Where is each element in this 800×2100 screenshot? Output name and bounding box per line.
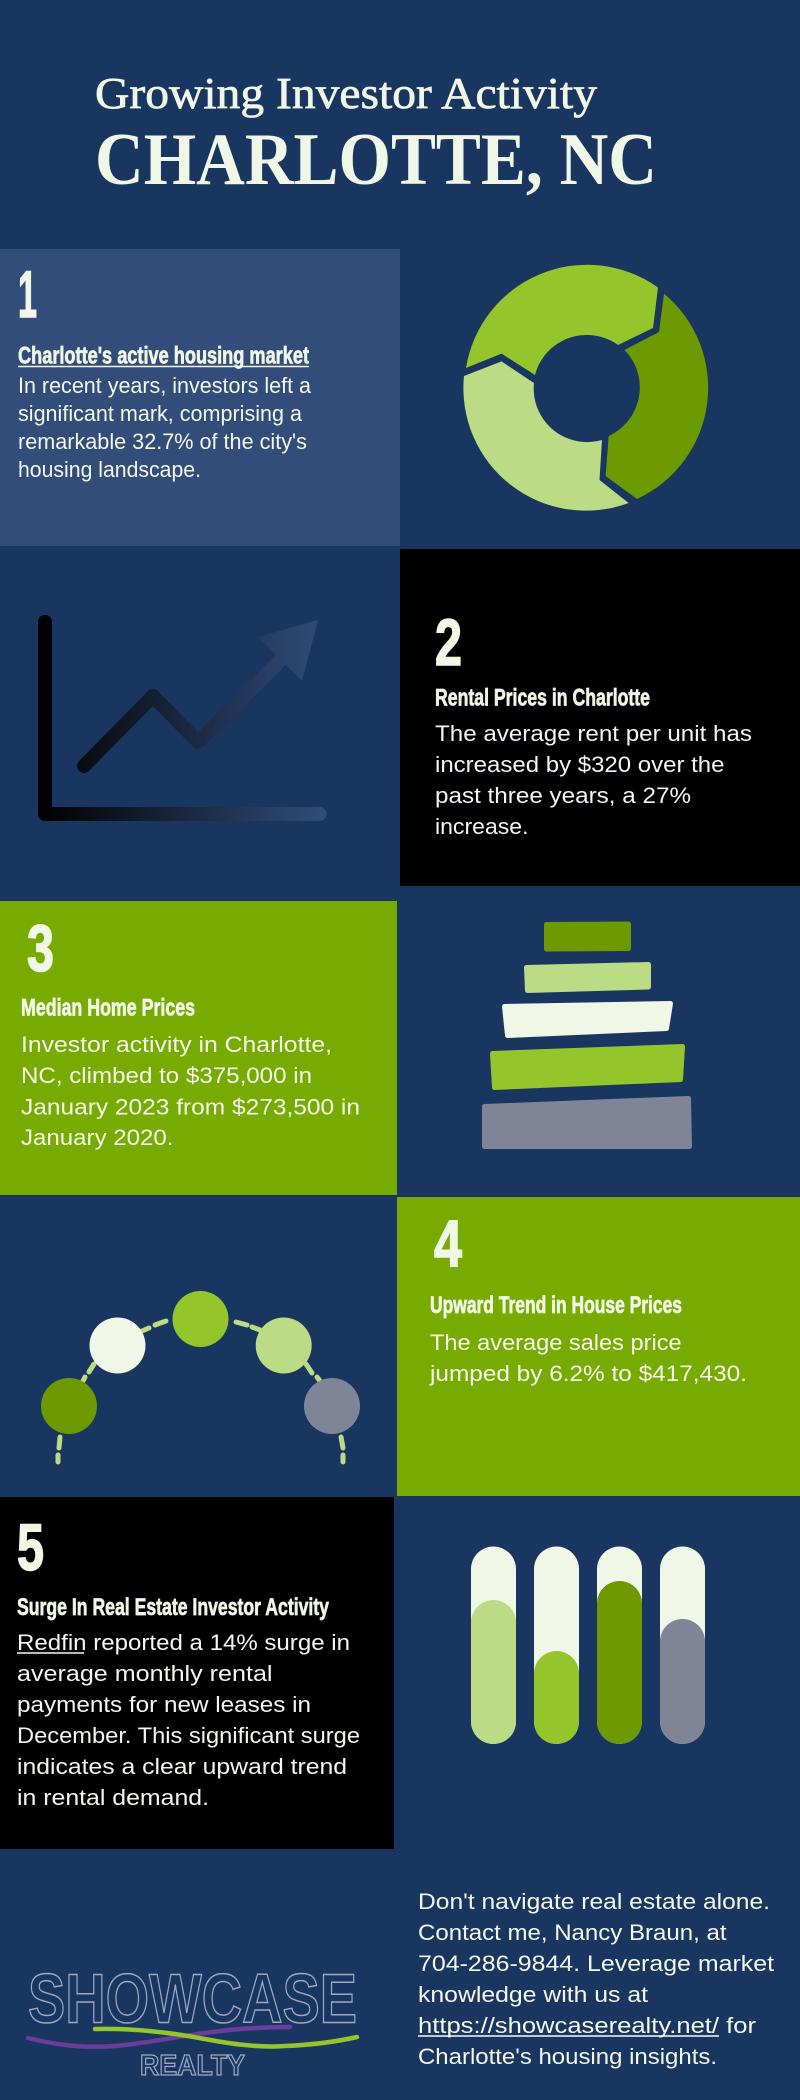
donut chart bbox=[463, 265, 708, 511]
body text 3: NC, climbed to $375,000 in bbox=[21, 1063, 312, 1088]
body text 2: The average rent per unit has bbox=[435, 721, 752, 746]
body text 3: January 2023 from $273,500 in bbox=[21, 1094, 360, 1120]
body text 2: increased by $320 over the bbox=[435, 752, 724, 777]
chart: vertical pill bars bbox=[471, 1546, 705, 1744]
heading 3: Median Home Prices bbox=[21, 995, 195, 1022]
title line: Growing Investor Activity: Growing Investor Activity bbox=[95, 69, 597, 118]
panel 3: median home prices bbox=[0, 901, 397, 1195]
diagram: arc of connected circles bbox=[41, 1291, 360, 1462]
contact call to action bbox=[418, 1889, 774, 2069]
body text 2: past three years, a 27% bbox=[435, 783, 691, 808]
number 4: 4 bbox=[434, 1206, 462, 1280]
panel 1: active housing market bbox=[0, 249, 400, 546]
body text 5: average monthly rental bbox=[17, 1661, 272, 1686]
body text 4 bbox=[429, 1330, 747, 1386]
contact call to action: 704-286-9844. Leverage market bbox=[418, 1951, 774, 1976]
body text 3 bbox=[21, 1032, 360, 1150]
heading 5: Surge In Real Estate Investor Activity bbox=[17, 1594, 329, 1621]
number 5: 5 bbox=[17, 1510, 44, 1584]
contact call to action: Charlotte's housing insights. bbox=[418, 2044, 717, 2069]
heading 4: Upward Trend in House Prices bbox=[430, 1292, 682, 1319]
title bbox=[95, 69, 657, 201]
body text 5: indicates a clear upward trend bbox=[17, 1754, 347, 1779]
icon: growth line chart with arrow bbox=[45, 620, 320, 814]
body text 3: Investor activity in Charlotte, bbox=[21, 1032, 332, 1057]
body text 2 bbox=[435, 721, 752, 839]
logo: Showcase Realty bbox=[28, 1960, 357, 2082]
body text 4: The average sales price bbox=[430, 1330, 682, 1355]
body text 1: remarkable 32.7% of the city's bbox=[18, 429, 307, 454]
contact call to action: Contact me, Nancy Braun, at bbox=[418, 1920, 726, 1945]
panel 2: rental prices bbox=[400, 549, 800, 886]
body text 1: In recent years, investors left a bbox=[18, 373, 312, 398]
panel 5: surge in investor activity bbox=[0, 1497, 394, 1849]
body text 5: in rental demand. bbox=[17, 1785, 209, 1810]
body text 5 bbox=[17, 1630, 360, 1810]
body text 1: housing landscape. bbox=[18, 457, 201, 482]
heading 2: Rental Prices in Charlotte bbox=[435, 684, 650, 711]
contact call to action: https://showcaserealty.net/ for bbox=[418, 2013, 756, 2038]
contact call to action: Don't navigate real estate alone. bbox=[418, 1889, 770, 1914]
number 3: 3 bbox=[27, 911, 54, 985]
number 2: 2 bbox=[435, 605, 462, 679]
body text 1: significant mark, comprising a bbox=[18, 401, 303, 426]
heading 1: Charlotte's active housing market bbox=[18, 342, 309, 370]
body text 1 bbox=[18, 373, 312, 482]
body text 4: jumped by 6.2% to $417,430. bbox=[429, 1361, 747, 1386]
logo: Showcase Realty: REALTY bbox=[140, 2050, 245, 2082]
body text 5: December. This significant surge bbox=[17, 1723, 360, 1748]
contact call to action: knowledge with us at bbox=[418, 1982, 648, 2007]
body text 3: January 2020. bbox=[21, 1125, 173, 1150]
logo: Showcase Realty: SHOWCASE bbox=[28, 1960, 357, 2038]
body text 5: Redfin reported a 14% surge in bbox=[17, 1630, 350, 1655]
number 1: 1 bbox=[18, 257, 37, 331]
icon: stacked pyramid blocks bbox=[484, 924, 690, 1146]
title line: Charlotte, NC: CHARLOTTE, NC bbox=[95, 119, 657, 201]
body text 5: payments for new leases in bbox=[17, 1692, 311, 1717]
panel 4: upward trend in house prices bbox=[397, 1197, 800, 1496]
body text 2: increase. bbox=[435, 814, 528, 839]
